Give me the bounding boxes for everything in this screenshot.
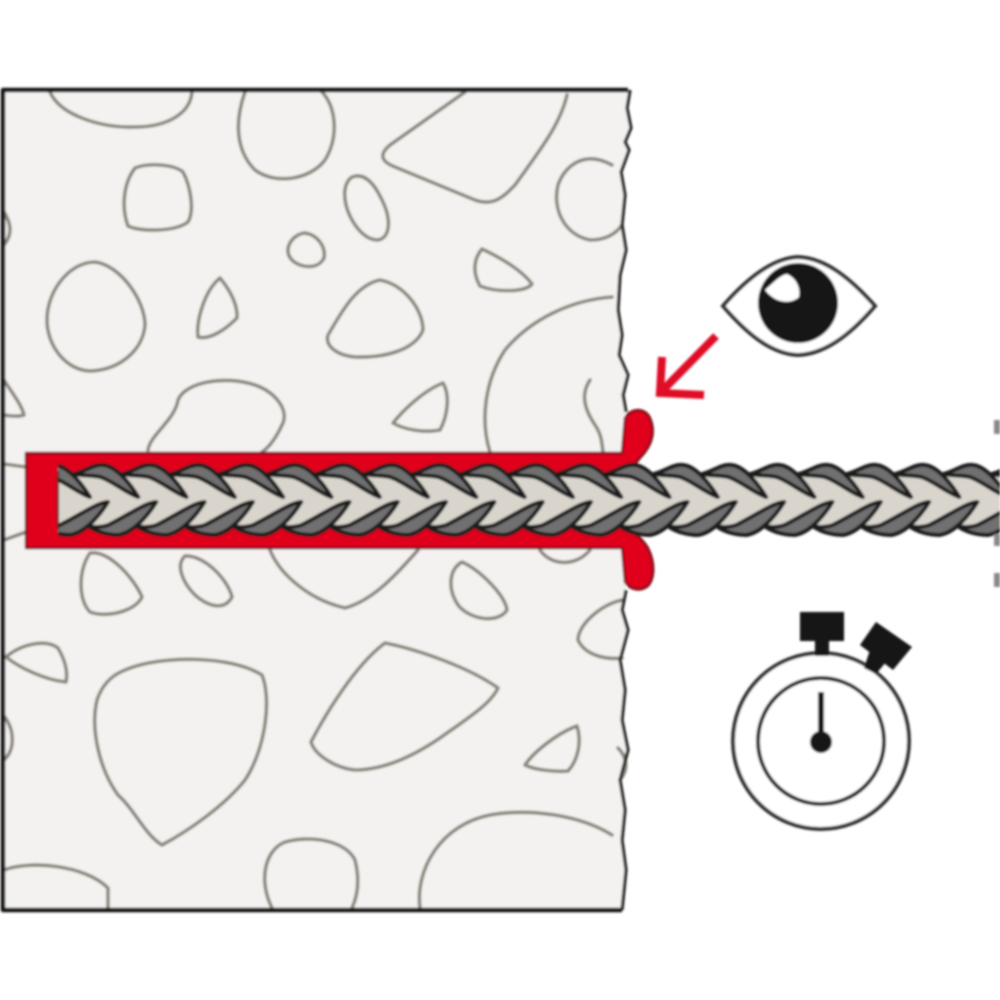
jagged right edge bbox=[618, 90, 631, 910]
cut marks at right edge bbox=[994, 420, 1000, 587]
rod left end bbox=[57, 471, 59, 530]
rod core bbox=[58, 473, 1000, 527]
rod thread bbox=[26, 465, 1000, 535]
red mortar sleeve with flanges bbox=[26, 410, 653, 589]
arrow: red pointer to flange bbox=[660, 336, 716, 395]
concrete outline bbox=[3, 90, 628, 910]
threaded rod bbox=[26, 465, 1000, 535]
icon: stopwatch bbox=[733, 612, 912, 829]
icon: eye bbox=[723, 257, 875, 355]
panel: concrete block bbox=[3, 90, 631, 910]
aggregate stones bbox=[4, 92, 626, 908]
